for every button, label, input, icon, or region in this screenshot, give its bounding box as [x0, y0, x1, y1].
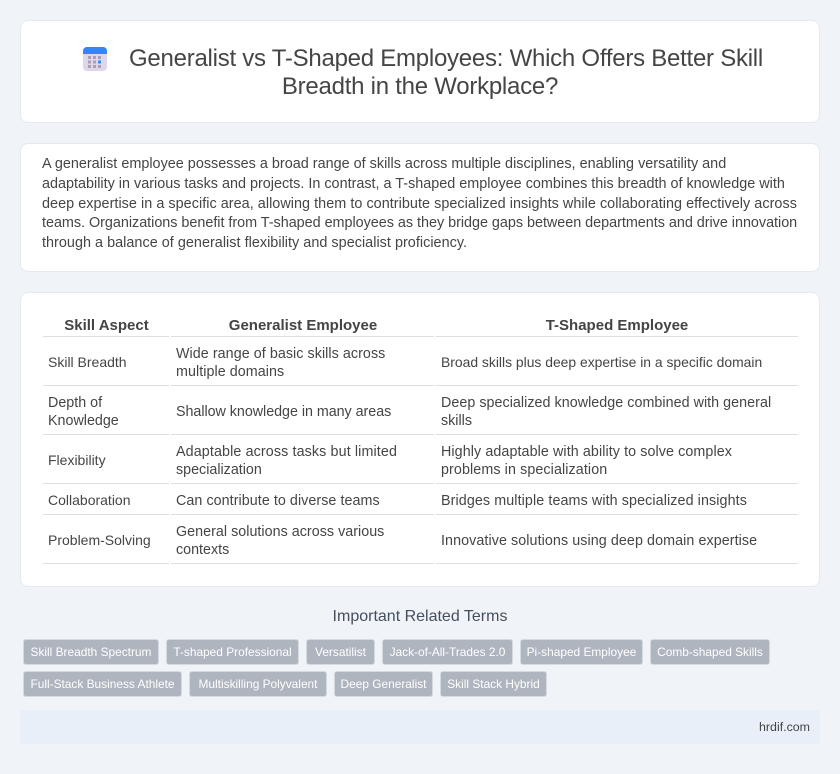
row: Depth of Knowledge: Shallow knowledge in many areas	[176, 404, 391, 420]
table header row: T-Shaped Employee	[546, 317, 688, 334]
related terms tags: Skill Breadth Spectrum	[31, 645, 151, 659]
related terms tags: T-shaped Professional	[173, 645, 292, 659]
related terms tags: Versatilist	[315, 645, 366, 659]
related terms heading: Important Related Terms	[333, 608, 507, 625]
row: Skill Breadth: multiple domains	[176, 364, 284, 380]
intro paragraph: teams. Organizations benefit from T-shaped employees as they bridge gaps between departments and drive innovation	[42, 215, 797, 231]
row: Skill Breadth: Broad skills plus deep expertise in a specific domain	[441, 354, 762, 370]
row: Depth of Knowledge: Knowledge	[48, 413, 119, 429]
row: Problem-Solving: Problem-Solving	[48, 532, 151, 548]
related terms tags: Skill Stack Hybrid	[447, 677, 540, 691]
row: Flexibility: specialization	[176, 462, 262, 478]
row: Flexibility	[48, 444, 732, 478]
row: Flexibility: Highly adaptable with ability to solve complex	[441, 444, 732, 460]
row: Problem-Solving: General solutions across various	[176, 524, 384, 540]
header panel	[20, 20, 820, 123]
footer source: hrdif.com	[759, 720, 810, 734]
related terms tags: Multiskilling Polyvalent	[199, 677, 317, 691]
table header row: Skill Aspect	[64, 317, 149, 334]
row: Skill Breadth: Skill Breadth	[48, 354, 127, 370]
row: Problem-Solving	[48, 524, 757, 558]
related terms tags: Pi-shaped Employee	[527, 645, 636, 659]
title: Breadth in the Workplace?	[282, 73, 558, 100]
related terms tags: Comb-shaped Skills	[657, 645, 763, 659]
intro paragraph: through a balance of generalist flexibility and specialist proficiency.	[42, 235, 467, 251]
table header row: Generalist Employee	[229, 317, 377, 334]
comparison table panel	[20, 292, 820, 587]
related terms tags	[23, 639, 770, 697]
related terms tags: Deep Generalist	[341, 677, 426, 691]
footer bar	[20, 710, 820, 744]
intro paragraph	[42, 156, 797, 251]
intro text panel	[20, 143, 820, 272]
row: Collaboration: Collaboration	[48, 492, 130, 508]
related terms tags: Full-Stack Business Athlete	[30, 677, 175, 691]
row: Skill Breadth: Wide range of basic skills across	[176, 346, 385, 362]
row: Collaboration: Bridges multiple teams with specialized insights	[441, 493, 747, 509]
row: Problem-Solving: contexts	[176, 542, 229, 558]
row: Problem-Solving: Innovative solutions using deep domain expertise	[441, 533, 757, 549]
row: Flexibility: Adaptable across tasks but limited	[176, 444, 397, 460]
title: Generalist vs T-Shaped Employees: Which Offers Better Skill	[129, 45, 763, 72]
intro paragraph: adaptability in various tasks and projects. In contrast, a T-shaped employee combines this breadth of knowledge with	[42, 176, 785, 192]
intro paragraph: A generalist employee possesses a broad range of skills across multiple disciplines, enabling versatility and	[42, 156, 726, 172]
row: Flexibility: problems in specialization	[441, 462, 607, 478]
intro paragraph: deep expertise in a specific area, allowing them to contribute specialized insights while collaborating effectively across	[42, 196, 797, 212]
title	[129, 45, 763, 100]
row: Collaboration: Can contribute to diverse teams	[176, 493, 380, 509]
related terms tags: Jack-of-All-Trades 2.0	[390, 645, 505, 659]
row: Depth of Knowledge: Depth of	[48, 395, 102, 411]
icon: calendar	[83, 47, 107, 71]
row: Depth of Knowledge	[48, 395, 771, 429]
table header row	[64, 317, 688, 334]
row: Depth of Knowledge: skills	[441, 413, 472, 429]
row: Flexibility: Flexibility	[48, 452, 106, 468]
row: Skill Breadth	[48, 346, 762, 380]
row: Depth of Knowledge: Deep specialized knowledge combined with general	[441, 395, 771, 411]
row: Collaboration	[48, 492, 747, 509]
